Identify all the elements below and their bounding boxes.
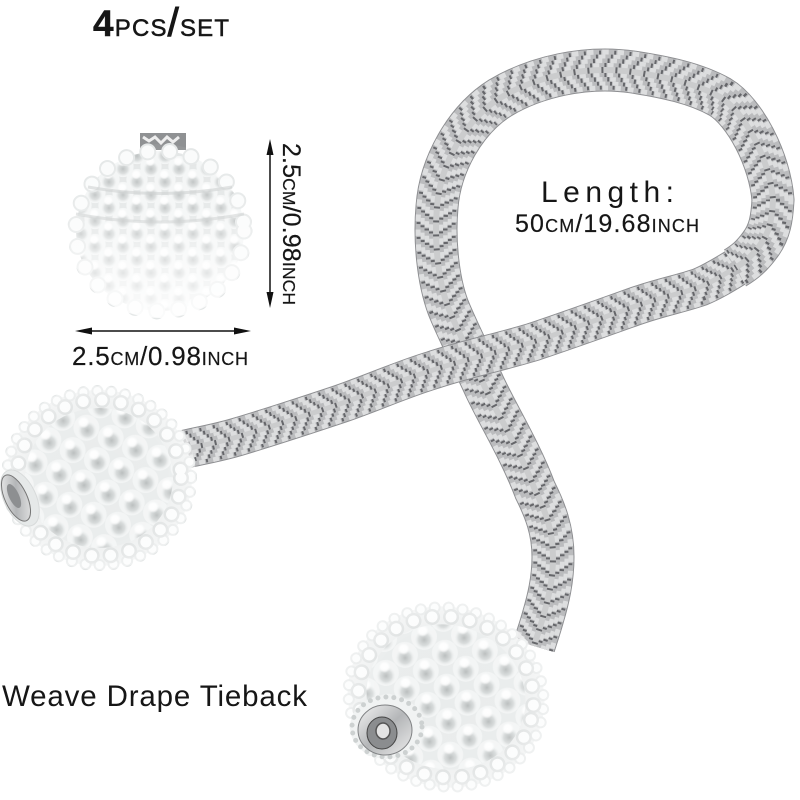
rope: section from left ball crossing over the loop xyxy=(175,268,735,452)
label: product name: Weave Drape Tieback xyxy=(2,680,307,713)
arrow: vertical dimension xyxy=(266,139,274,308)
arrow: horizontal dimension xyxy=(75,328,251,334)
small pearl ball detail xyxy=(68,133,252,318)
icon: magnet snap on left ball xyxy=(0,464,47,532)
label: horizontal ball dimension: 2.5CM/0.98INCH xyxy=(72,341,248,371)
title: 4PCS/SET: 4PCS/SET xyxy=(93,1,229,45)
left pearl ball with magnet xyxy=(0,386,196,570)
label: vertical ball dimension: 2.5 CM /0.98 INCH xyxy=(277,143,305,305)
rope: braided cord loop and descending section xyxy=(436,70,773,646)
icon: magnet snap on bottom ball xyxy=(350,695,424,759)
bottom pearl ball with magnet xyxy=(321,578,571,800)
label: Length heading: Length: xyxy=(541,176,674,209)
label: length value: 50CM/19.68INCH xyxy=(515,210,699,238)
